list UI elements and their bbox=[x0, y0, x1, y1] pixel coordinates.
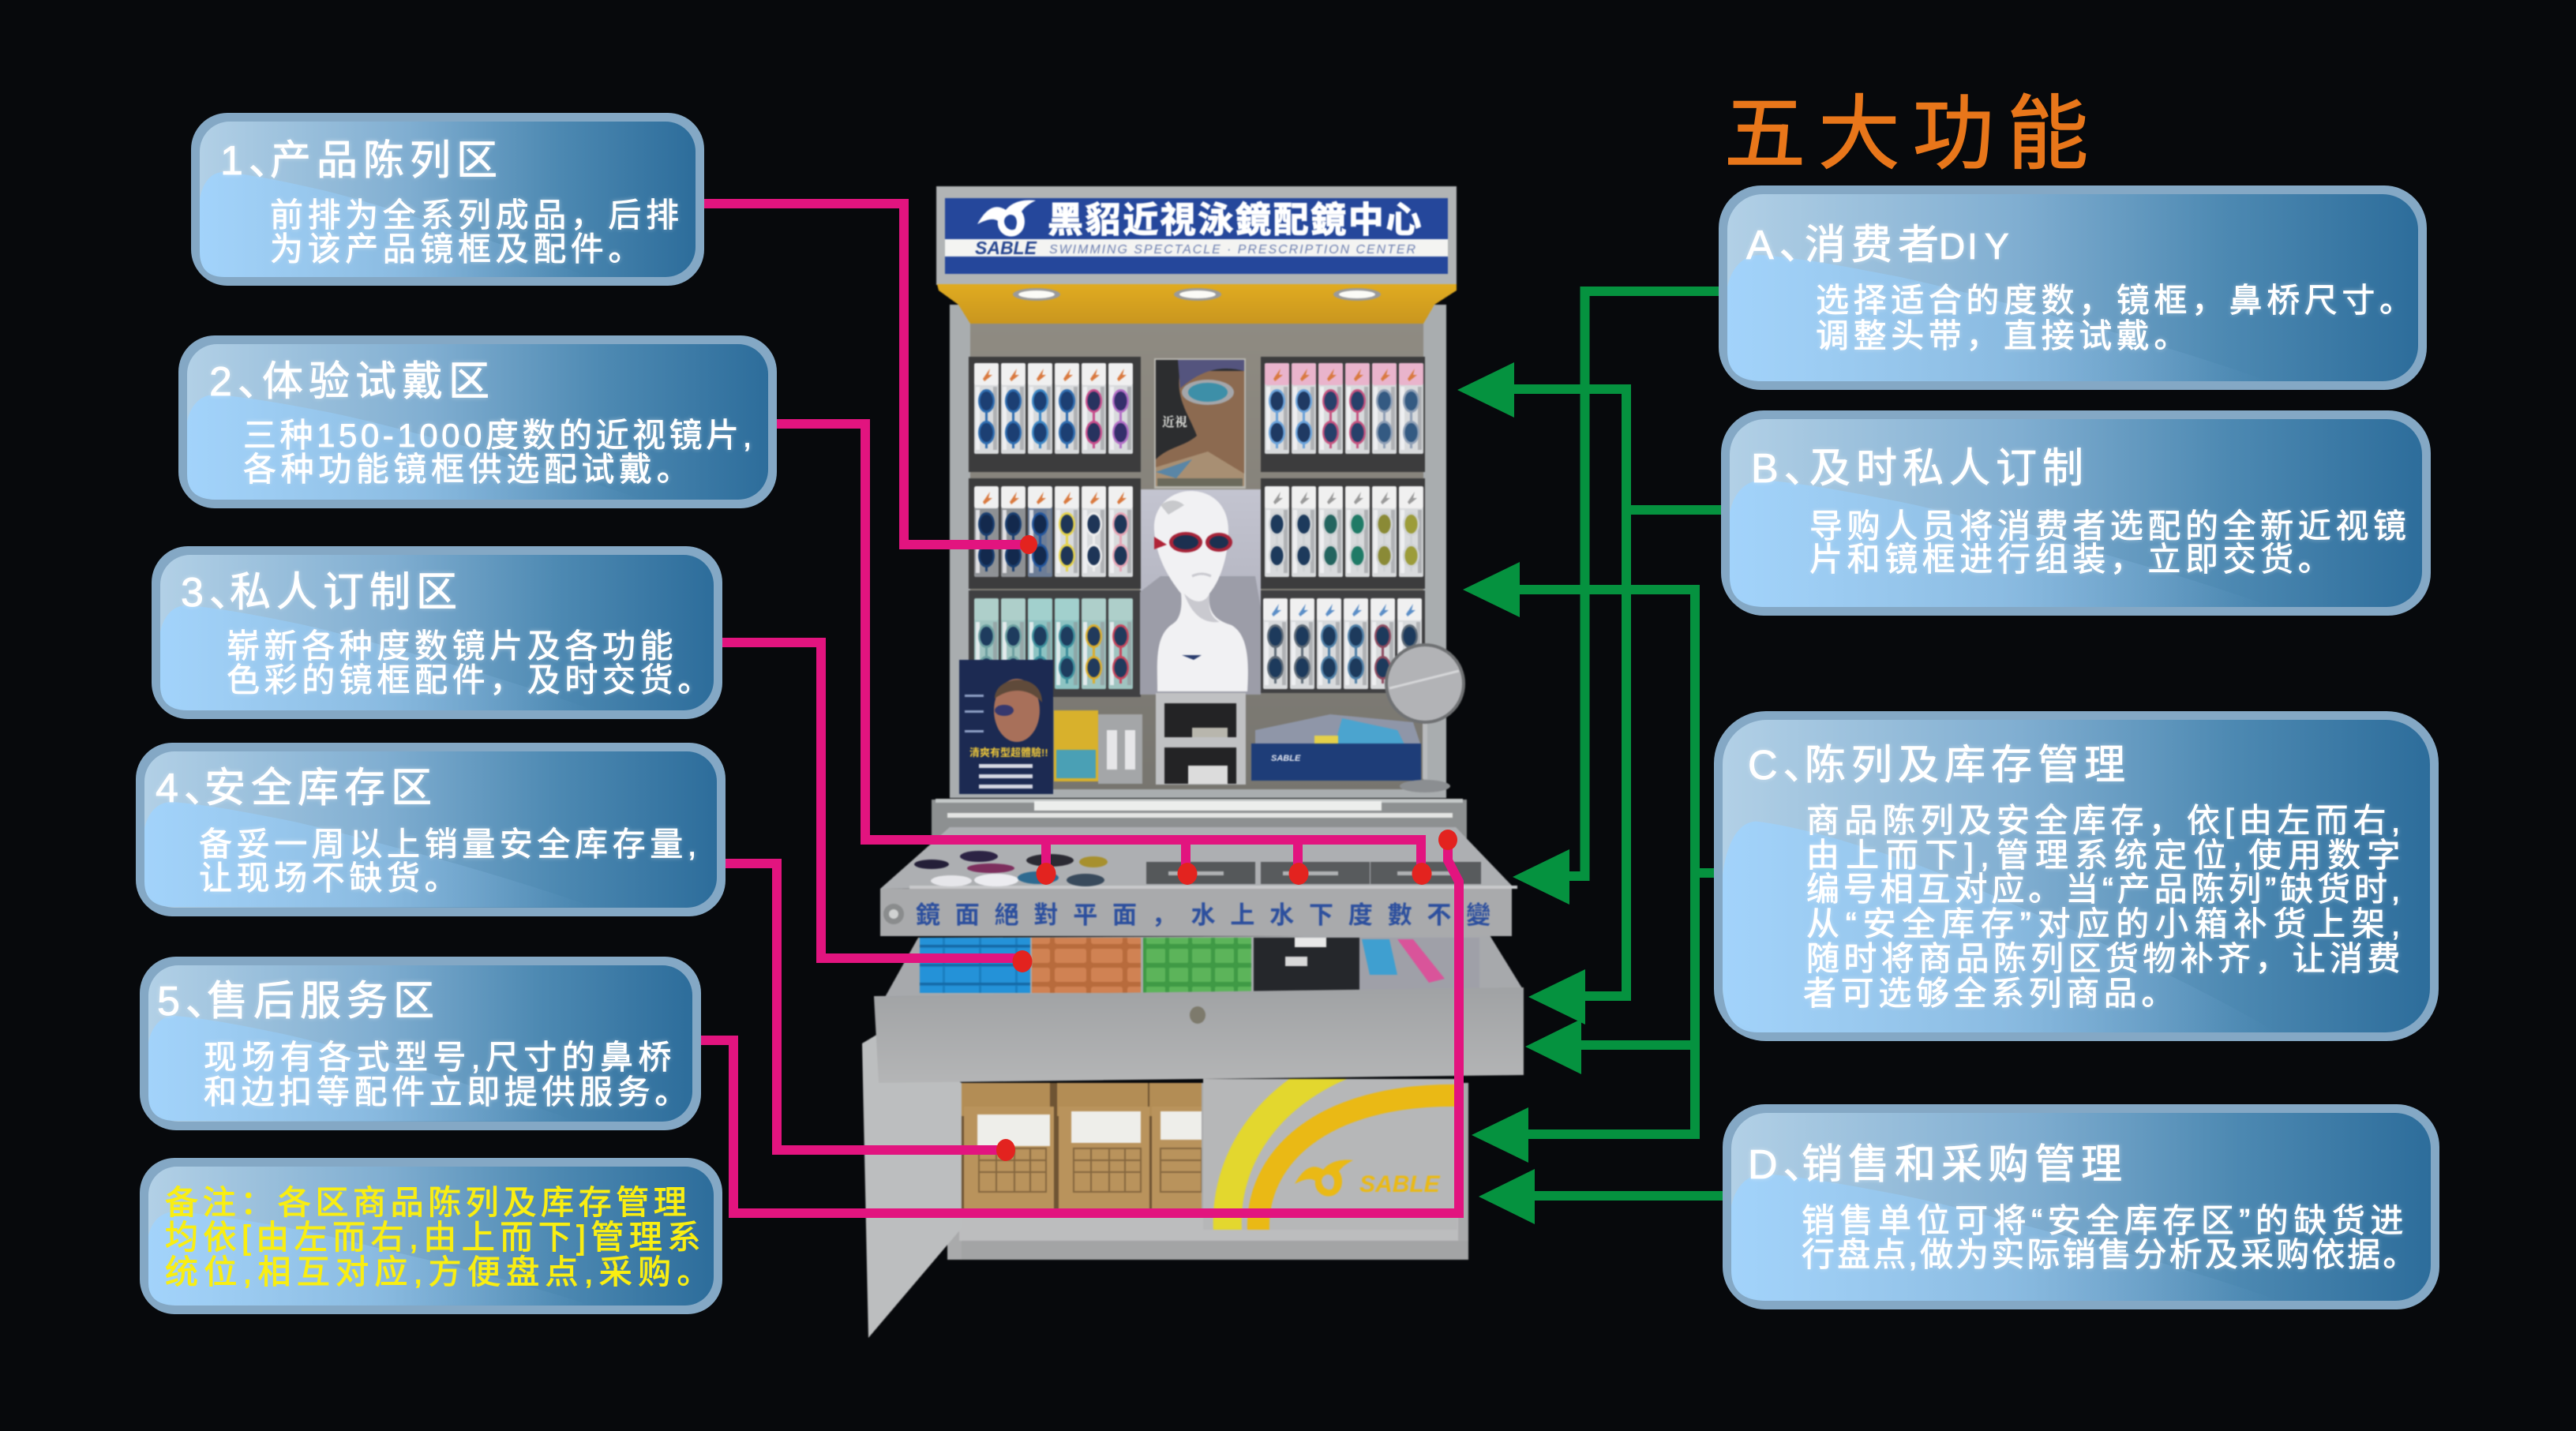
panel: zone 1 product display bbox=[191, 113, 704, 286]
description bbox=[243, 417, 756, 488]
heading: 销售和采购管理 bbox=[1802, 1142, 2128, 1188]
description bbox=[1803, 802, 2405, 1012]
description: 导购人员将消费者选配的全新近视镜 bbox=[1809, 508, 2411, 545]
description: 色彩的镜框配件，及时交货。 bbox=[227, 661, 715, 699]
note text: 均依[由左而右,由上而下]管理系 bbox=[165, 1219, 705, 1256]
accessory box bbox=[1251, 714, 1421, 781]
green connector: B custom bbox=[1457, 362, 1721, 1025]
heading: C、 bbox=[1748, 743, 1830, 789]
connector: zone 5 to service tray bbox=[701, 830, 1459, 1213]
note text bbox=[165, 1184, 714, 1291]
panel: note bbox=[140, 1158, 722, 1314]
heading: 陈列及库存管理 bbox=[1805, 743, 2131, 789]
connector: zone 2 to upper drawer bbox=[777, 424, 1432, 885]
heading: 2、 bbox=[209, 359, 284, 405]
description bbox=[1802, 1202, 2420, 1273]
door logo bbox=[1295, 1160, 1353, 1197]
heading: 安全库存区 bbox=[204, 766, 437, 811]
sign english subtitle: SWIMMING SPECTACLE · PRESCRIPTION CENTER bbox=[1049, 243, 1415, 257]
promotional flyer bbox=[959, 660, 1053, 794]
description: 随时将商品陈列区货物补齐，让消费 bbox=[1806, 940, 2405, 977]
shelf products bbox=[1054, 710, 1142, 784]
flyer headline: 清爽有型超體驗!! bbox=[969, 747, 1048, 759]
description: 和边扣等配件立即提供服务。 bbox=[204, 1073, 692, 1111]
heading: 体验试戴区 bbox=[262, 359, 495, 405]
description: 调整头带，直接试戴。 bbox=[1816, 317, 2192, 354]
panel: A consumer DIY bbox=[1719, 185, 2427, 390]
description: 者可选够全系列商品。 bbox=[1803, 975, 2179, 1012]
title: five functions: 五大功能 bbox=[1724, 88, 2102, 179]
connector: zone 1 to upper racks bbox=[704, 204, 1037, 554]
note text: 统位,相互对应,方便盘点,采购。 bbox=[165, 1253, 714, 1291]
description: 片和镜框进行组装，立即交货。 bbox=[1809, 541, 2335, 578]
upper drawer tray bbox=[880, 827, 1517, 889]
description: 崭新各种度数镜片及各功能 bbox=[227, 627, 677, 665]
goggle racks left bbox=[974, 363, 1133, 689]
heading: A、 bbox=[1746, 223, 1826, 268]
drawer slogan: 鏡面絕對平面，水上水下度數不變 bbox=[916, 901, 1505, 929]
description: 商品陈列及安全库存，依[由左而右, bbox=[1806, 802, 2405, 839]
panel: zone 5 after-sales bbox=[140, 957, 701, 1130]
box brand: SABLE bbox=[1271, 754, 1301, 763]
yellow canopy with lights bbox=[937, 284, 1457, 324]
lower drawer tray bbox=[884, 935, 1524, 998]
poster caption: 近視 bbox=[1162, 415, 1187, 429]
door brand: SABLE bbox=[1359, 1171, 1441, 1197]
cabinet upper frame columns and back wall bbox=[950, 305, 1446, 798]
heading: 私人订制区 bbox=[230, 570, 463, 616]
heading: D、 bbox=[1748, 1142, 1830, 1188]
panel: D sales and purchasing bbox=[1723, 1104, 2439, 1309]
description: 现场有各式型号,尺寸的鼻桥 bbox=[204, 1039, 676, 1076]
description: 销售单位可将“安全库存区”的缺货进 bbox=[1802, 1202, 2408, 1239]
description: 备妥一周以上销量安全库存量, bbox=[199, 826, 701, 863]
connector: zone 4 to stock boxes bbox=[726, 863, 1015, 1161]
poster: swimmer bbox=[1154, 358, 1246, 489]
yellow logo door panel bbox=[1203, 1066, 1460, 1231]
panel: zone 4 safety stock bbox=[136, 743, 726, 916]
upper drawer front with slogan bbox=[880, 889, 1512, 936]
sign logo bbox=[977, 200, 1036, 237]
description: 选择适合的度数，镜框，鼻桥尺寸。 bbox=[1816, 282, 2417, 319]
glass counter bbox=[932, 799, 1467, 839]
sign brand: SABLE bbox=[975, 238, 1037, 258]
lit sign header bbox=[936, 186, 1457, 285]
note text: 备注：各区商品陈列及库存管理 bbox=[165, 1184, 691, 1221]
green connector: A consumer DIY bbox=[1513, 291, 1723, 905]
makeup mirror bbox=[1385, 643, 1465, 792]
mannequin head with goggles bbox=[1140, 491, 1261, 695]
description: 编号相互对应。当“产品陈列”缺货时, bbox=[1806, 871, 2405, 908]
heading: 售后服务区 bbox=[207, 979, 440, 1025]
panel: B instant custom bbox=[1721, 410, 2431, 616]
lower drawer front with lock bbox=[874, 987, 1524, 1083]
connector: zone 3 to lower drawer bbox=[722, 642, 1033, 972]
heading: B、 bbox=[1751, 446, 1831, 492]
heading: 5、 bbox=[157, 979, 232, 1025]
heading: 产品陈列区 bbox=[270, 138, 503, 184]
panel: C display and inventory management bbox=[1714, 711, 2439, 1041]
description: 为该产品镜框及配件。 bbox=[270, 230, 646, 268]
green connector: D sales bbox=[1479, 1169, 1723, 1224]
stock boxes bbox=[959, 1083, 1202, 1209]
lower cabinet body bbox=[947, 1083, 1468, 1260]
heading: 消费者 bbox=[1805, 223, 1944, 268]
description: 各种功能镜框供选配试戴。 bbox=[243, 451, 694, 488]
heading: DIY bbox=[1939, 226, 2009, 267]
heading: 及时私人订制 bbox=[1809, 446, 2089, 492]
sign chinese title: 黑貂近視泳鏡配鏡中心 bbox=[1048, 200, 1423, 240]
storage shelf bbox=[1156, 693, 1246, 785]
description: 三种150-1000度数的近视镜片, bbox=[243, 417, 756, 454]
description: 前排为全系列成品，后排 bbox=[270, 197, 684, 234]
display cabinet photo bbox=[862, 186, 1524, 1338]
heading: 4、 bbox=[156, 766, 231, 811]
panel: zone 3 custom bbox=[152, 546, 722, 719]
heading: 3、 bbox=[181, 570, 256, 616]
description bbox=[204, 1039, 692, 1111]
description: 让现场不缺货。 bbox=[199, 860, 462, 897]
green connector: C display and inventory bbox=[1463, 562, 1714, 1163]
goggle racks right bbox=[1263, 363, 1423, 689]
description: 行盘点,做为实际销售分析及采购依据。 bbox=[1802, 1236, 2420, 1273]
open cabinet door bbox=[862, 1034, 962, 1338]
panel: zone 2 try-on bbox=[178, 335, 777, 508]
description: 从“安全库存”对应的小箱补货上架, bbox=[1806, 905, 2405, 942]
heading: 1、 bbox=[220, 138, 295, 184]
description: 由上而下],管理系统定位,使用数字 bbox=[1806, 837, 2405, 874]
